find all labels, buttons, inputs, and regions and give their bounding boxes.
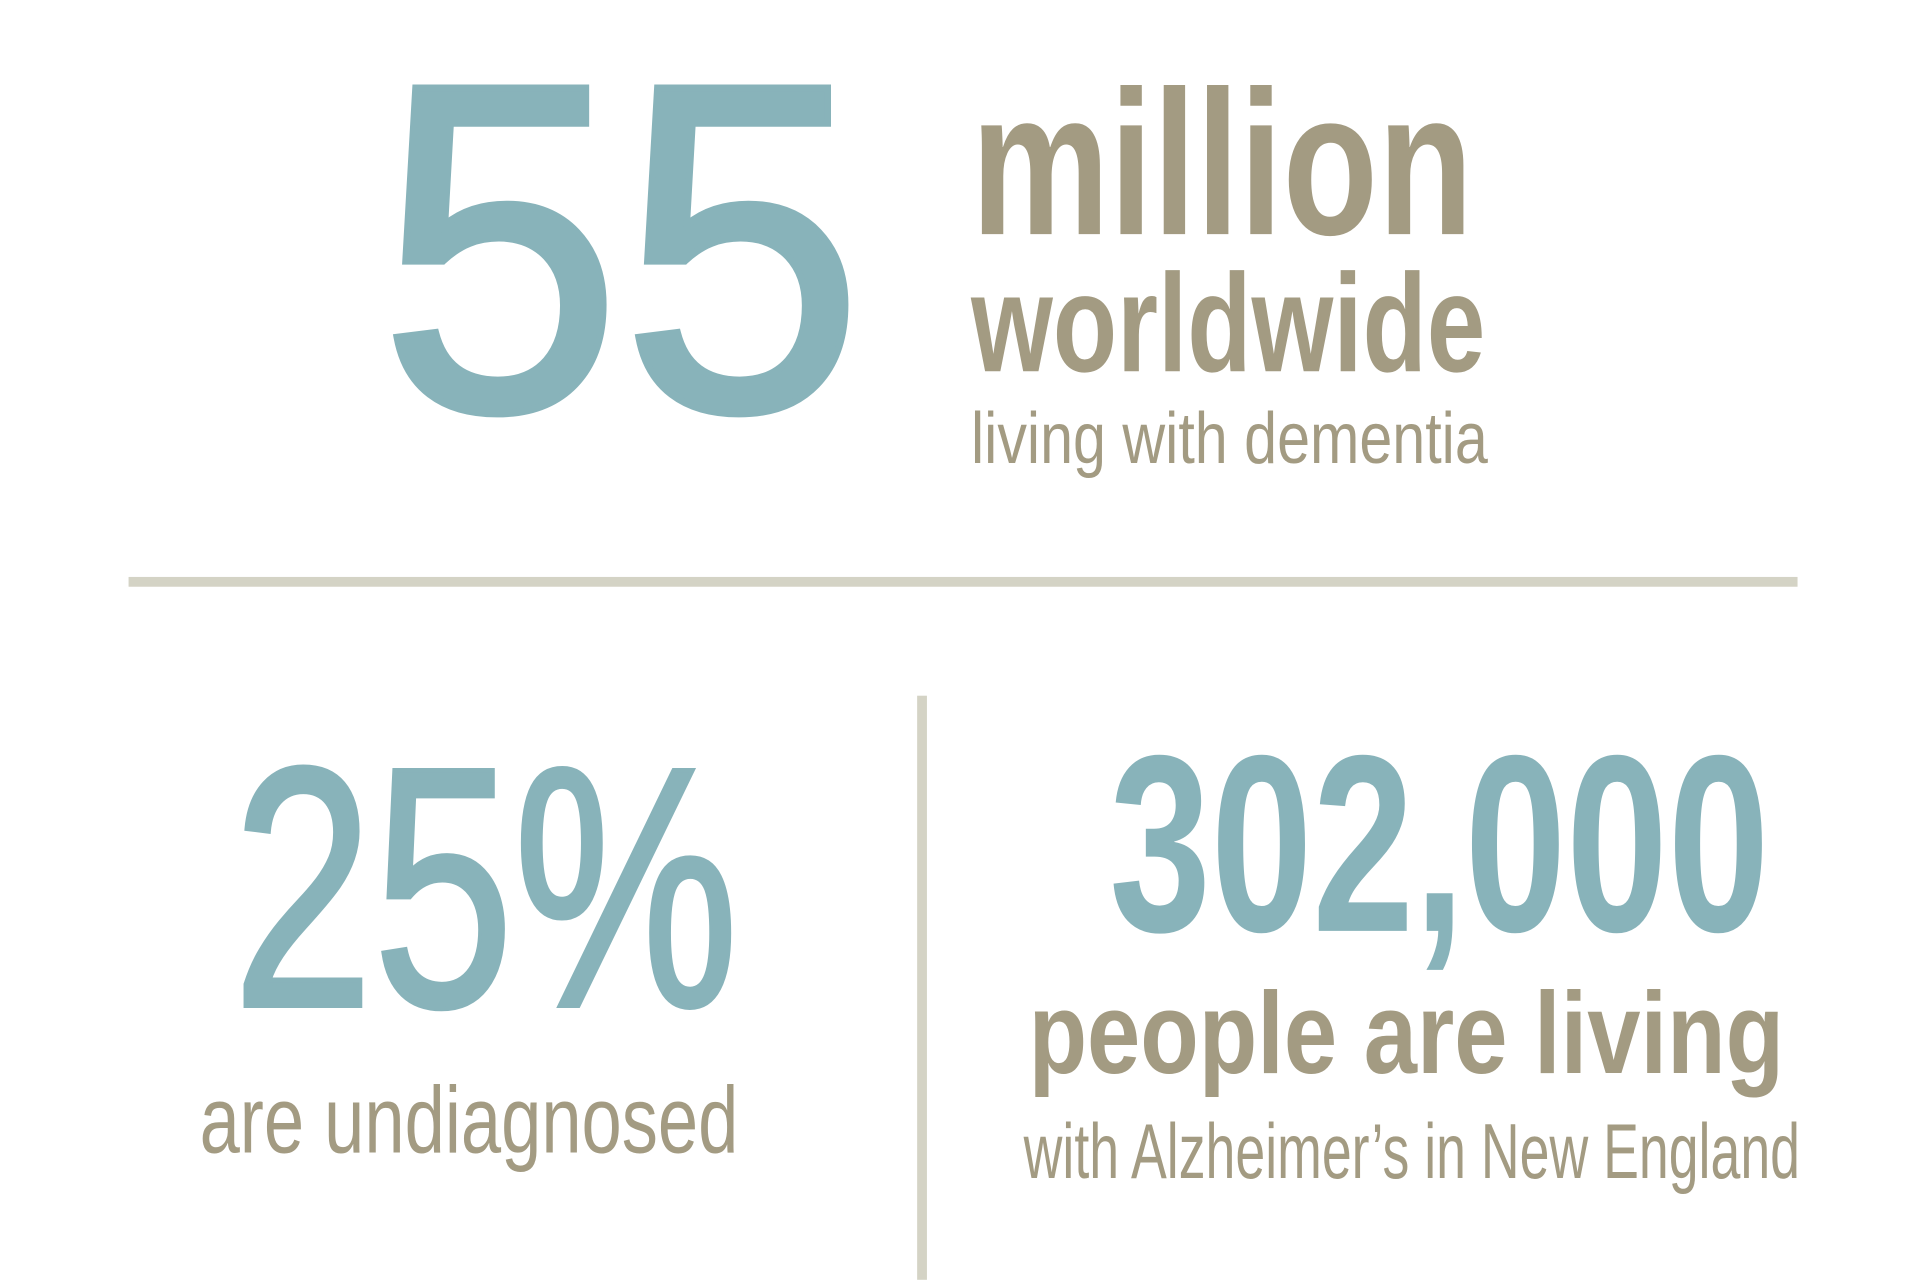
big number 55: 55 bbox=[380, 0, 863, 508]
stat: 25% undiagnosed bbox=[200, 698, 738, 1172]
stat: 55 million worldwide bbox=[380, 0, 1488, 508]
label: living with dementia: living with dementia bbox=[971, 399, 1488, 479]
label: are undiagnosed: are undiagnosed bbox=[200, 1067, 738, 1172]
big number 25%: 25% bbox=[233, 698, 738, 1079]
label: people are living: people are living bbox=[1029, 968, 1784, 1098]
label: million: million bbox=[971, 48, 1473, 278]
label: worldwide: worldwide bbox=[970, 245, 1485, 401]
stat: 302,000 in New England bbox=[1023, 704, 1800, 1195]
